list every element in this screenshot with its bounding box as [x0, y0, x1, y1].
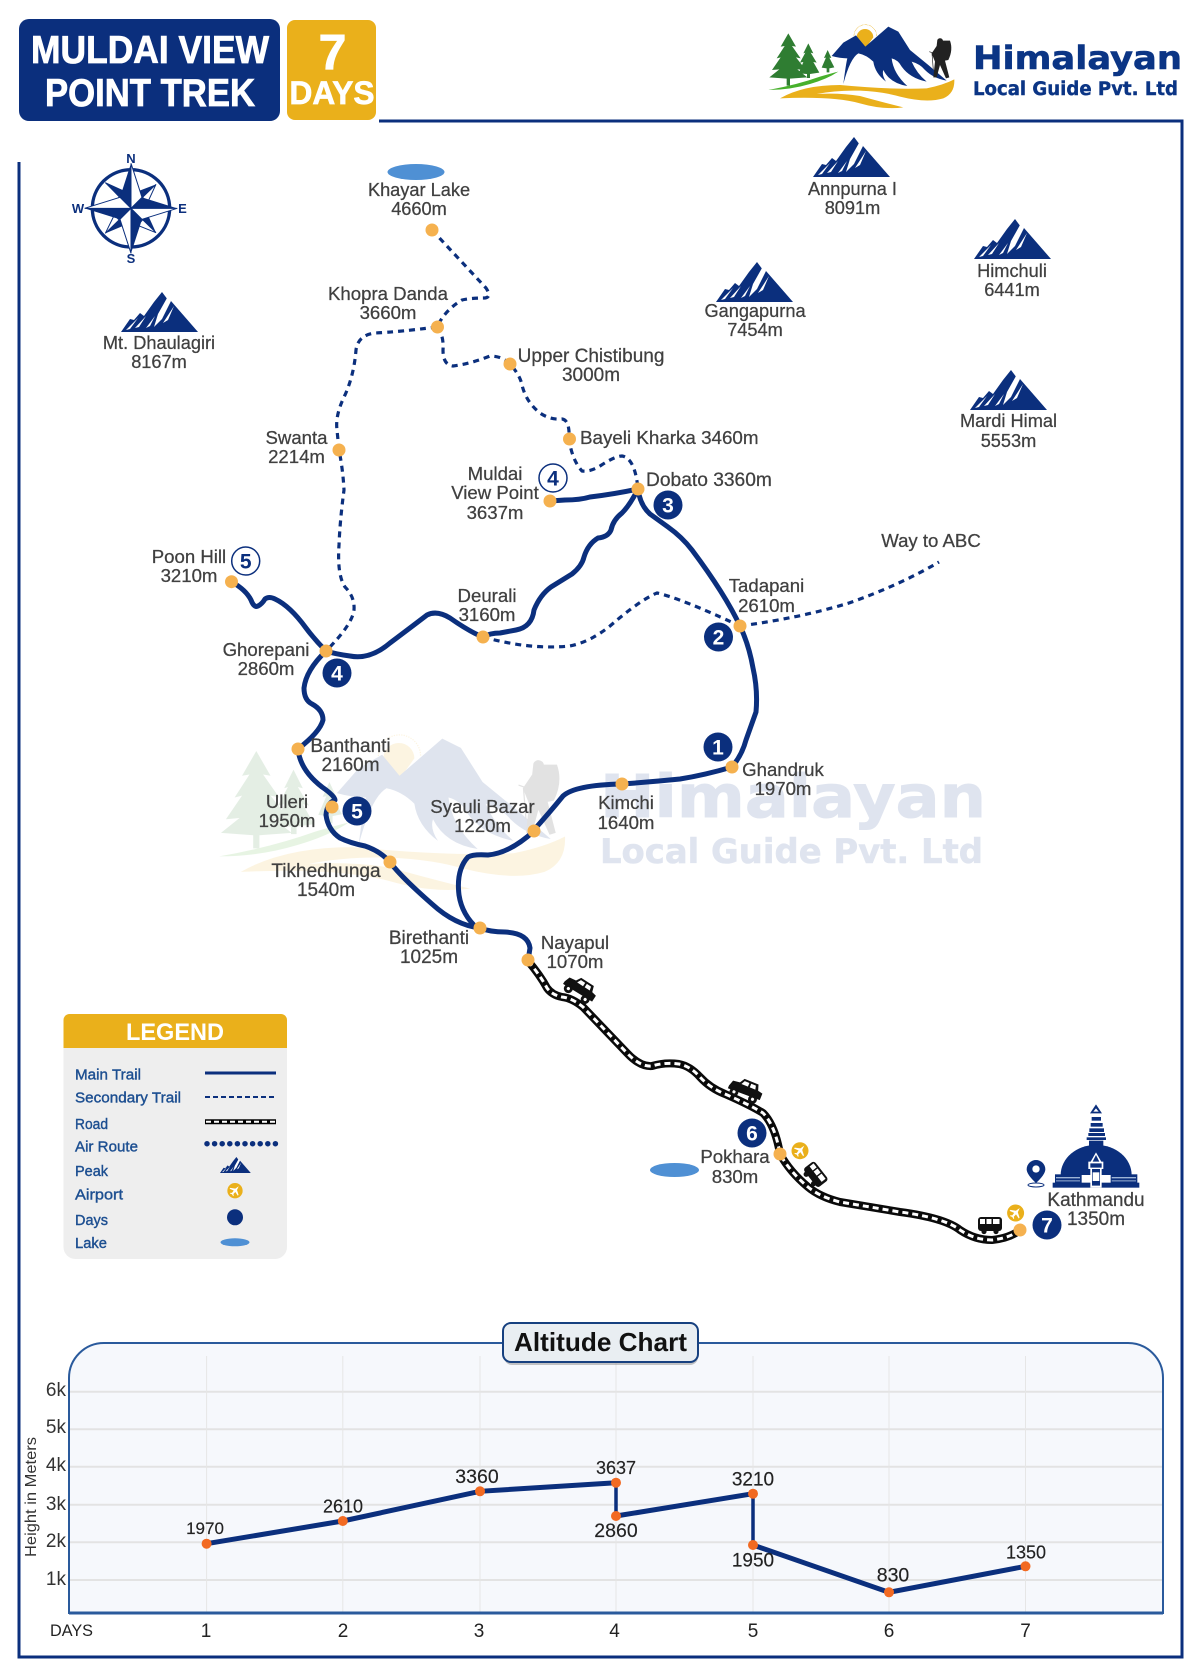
- main trail: [232, 489, 757, 961]
- secondary trails: [326, 230, 939, 651]
- waypoint: Tikhedhunga: Tikhedhunga: [271, 861, 381, 882]
- watermark logo: Local Guide Pvt. Ltd: [600, 832, 983, 872]
- peak: Annpurna I: [808, 137, 897, 218]
- legend header: LEGEND: [126, 1019, 224, 1046]
- waypoint: Muldai View Point: 3637m: [467, 502, 523, 523]
- waypoint: Bayeli Kharka: Bayeli Kharka 3460m: [580, 427, 759, 448]
- legend: main trail: Main Trail: [75, 1066, 141, 1083]
- side trip badge 4: [539, 464, 567, 492]
- waypoint: Poon Hill: 3210m: [161, 565, 217, 586]
- legend panel: [64, 1014, 287, 1259]
- waypoint: Swanta: 2214m: [268, 446, 325, 467]
- vehicles: [560, 971, 1002, 1234]
- watermark logo: Himalayan: [600, 762, 986, 831]
- lake: Phewa at Pokhara: [650, 1163, 699, 1177]
- waypoint: Nayapul: 1070m: [547, 951, 603, 972]
- compass rose: E: [178, 201, 187, 216]
- waypoint: Birethanti: Birethanti: [389, 928, 469, 949]
- waypoint: Upper Chistibung: [504, 346, 664, 386]
- peak: Annpurna I: 8091m: [825, 198, 880, 218]
- waypoint: Kathmandu node: [1014, 1224, 1026, 1236]
- lake: Khayar: Khayar Lake: [368, 180, 470, 200]
- waypoint: Banthanti: Banthanti: [310, 736, 391, 757]
- waypoint: Kimchi: Kimchi: [598, 792, 654, 813]
- stupa and location pin: Kathmandu: [1047, 1190, 1145, 1211]
- x axis labels: DAYS: [50, 1621, 93, 1640]
- day badge 1: 1: [712, 736, 724, 760]
- waypoint: Birethanti: [389, 922, 486, 968]
- waypoint: Ulleri: 1950m: [259, 810, 315, 831]
- waypoint: Ulleri: Ulleri: [266, 791, 308, 812]
- peak: Himchuli: Himchuli: [977, 261, 1047, 281]
- side trip badge 5: [232, 547, 260, 575]
- waypoint: Tadapani: 2610m: [738, 595, 795, 616]
- altitude values: 1970: [186, 1519, 224, 1538]
- watermark logo: [219, 735, 986, 890]
- peak: Gangapurna: Gangapurna: [704, 301, 806, 321]
- legend: road: Road: [75, 1116, 108, 1133]
- waypoint: Syauli Bazar: [430, 796, 540, 838]
- label: Way to ABC: Way to ABC: [881, 530, 981, 551]
- waypoint: Muldai View Point: Muldai: [468, 463, 522, 484]
- waypoint: Khopra Danda: [328, 283, 449, 334]
- legend: air route: Air Route: [75, 1139, 138, 1156]
- side trip badge 5: 5: [240, 550, 252, 574]
- altitude values: 1950: [732, 1551, 774, 1572]
- company logo: Himalayan: [973, 39, 1182, 77]
- stupa and location pin: 1350m: [1067, 1209, 1125, 1230]
- waypoint: Nayapul: [522, 932, 609, 972]
- x axis labels: [50, 1621, 1031, 1642]
- legend: airport: Airport: [75, 1186, 124, 1203]
- y axis labels: 3k: [46, 1494, 66, 1515]
- day badge 4: 4: [331, 662, 343, 686]
- waypoint: Banthanti: [292, 736, 391, 776]
- peak: Mt. Dhaulagiri: 8167m: [131, 352, 187, 372]
- y axis labels: 1k: [46, 1569, 66, 1590]
- duration badge: 7: [319, 24, 346, 80]
- x axis labels: 5: [748, 1621, 758, 1642]
- peak: Mardi Himal: Mardi Himal: [960, 411, 1057, 431]
- day badge 2: [704, 622, 733, 652]
- altitude line: [207, 1483, 1026, 1592]
- waypoint: Ghorepani: Ghorepani: [223, 639, 309, 660]
- day badge 3: [654, 490, 682, 520]
- waypoint: Upper Chistibung: Upper Chistibung: [518, 346, 664, 367]
- chart panel: [69, 1343, 1163, 1613]
- x axis labels: 2: [338, 1621, 348, 1642]
- peak: Himchuli: 6441m: [984, 280, 1040, 300]
- compass rose: N: [126, 151, 136, 166]
- waypoint: Muldai View Point: View Point: [451, 482, 540, 503]
- waypoint: Pokhara: 830m: [712, 1166, 758, 1187]
- duration badge: DAYS: [290, 75, 374, 111]
- legend header: [64, 1014, 287, 1048]
- waypoint: Ulleri: [259, 791, 338, 831]
- altitude values: 2610: [323, 1497, 363, 1517]
- stupa and location pin: [1027, 1104, 1145, 1230]
- waypoint: Tadapani: [729, 575, 804, 632]
- waypoint: Ghandruk: 1970m: [755, 778, 811, 799]
- chart title: Altitude Chart: [514, 1327, 687, 1357]
- altitude chart: [23, 1323, 1163, 1642]
- duration badge: [287, 20, 376, 120]
- compass rose: [72, 151, 187, 266]
- y axis labels: 6k: [46, 1380, 66, 1401]
- waypoint: Birethanti: 1025m: [400, 947, 458, 968]
- legend: days: Days: [75, 1212, 108, 1229]
- day badge 4: [322, 658, 352, 688]
- peak: Himchuli: [974, 219, 1051, 300]
- x axis labels: 3: [474, 1621, 484, 1642]
- waypoint: Upper Chistibung: 3000m: [562, 365, 620, 386]
- altitude values: 3637: [596, 1458, 636, 1478]
- waypoint: Deurali: [458, 585, 516, 644]
- legend: peak: Peak: [75, 1163, 108, 1180]
- peak: Annpurna I: Annpurna I: [808, 179, 897, 199]
- day badge 7: 7: [1041, 1214, 1053, 1238]
- waypoint: Khayar Lake node: [426, 224, 438, 236]
- waypoint: Kimchi: [598, 778, 654, 833]
- day badge 1: [704, 732, 732, 762]
- peak: Mardi Himal: [960, 370, 1057, 451]
- y axis labels: 4k: [46, 1455, 66, 1476]
- altitude values: 1350: [1006, 1543, 1046, 1563]
- waypoint: Tikhedhunga: 1540m: [297, 880, 355, 901]
- x axis labels: 1: [201, 1621, 211, 1642]
- altitude values: 2860: [594, 1520, 638, 1542]
- waypoint: Poon Hill: [152, 546, 238, 588]
- side trip badge 4: 4: [547, 468, 559, 490]
- waypoint: Ghandruk: [726, 759, 825, 799]
- compass rose: S: [127, 251, 136, 266]
- company logo: Local Guide Pvt. Ltd: [973, 79, 1178, 100]
- waypoint: Deurali: Deurali: [458, 585, 516, 606]
- waypoint: Nayapul: Nayapul: [541, 932, 609, 953]
- waypoint: Dobato: Dobato 3360m: [646, 470, 772, 491]
- altitude values: [186, 1458, 1046, 1587]
- lake: Khayar: [368, 164, 470, 219]
- legend: secondary trail: Secondary Trail: [75, 1090, 181, 1107]
- legend: lake: [75, 1235, 250, 1252]
- waypoint: Banthanti: 2160m: [321, 755, 380, 776]
- altitude values: 830: [877, 1565, 909, 1587]
- day badge 6: 6: [746, 1122, 758, 1146]
- altitude points: [202, 1478, 1031, 1597]
- waypoint: Ghorepani: 2860m: [238, 658, 294, 679]
- waypoint: Khopra Danda: Khopra Danda: [328, 283, 448, 304]
- waypoint: Deurali: 3160m: [459, 604, 515, 625]
- peak: Gangapurna: 7454m: [727, 320, 783, 340]
- waypoint: Tikhedhunga: [271, 856, 396, 901]
- day badge 5: [342, 796, 372, 826]
- title banner: MULDAI VIEW: [31, 29, 269, 72]
- day badge 2: 2: [713, 626, 724, 650]
- legend: lake: Lake: [75, 1235, 107, 1252]
- chart grid: [70, 1392, 1162, 1580]
- x axis labels: 7: [1020, 1621, 1031, 1642]
- waypoint: Muldai View Point: [451, 463, 556, 523]
- peak: Mardi Himal: 5553m: [981, 431, 1036, 451]
- altitude values: 3360: [455, 1466, 499, 1488]
- y axis labels: 2k: [46, 1531, 66, 1552]
- x axis labels: 6: [884, 1621, 894, 1642]
- airports: [792, 1142, 1024, 1222]
- legend: airport: [75, 1183, 243, 1203]
- waypoint: Pokhara: Pokhara: [700, 1146, 770, 1167]
- lake: Khayar: 4660m: [391, 199, 447, 219]
- waypoint: Syauli Bazar: Syauli Bazar: [430, 796, 535, 817]
- waypoint: Ghandruk: Ghandruk: [742, 759, 824, 780]
- peak: Gangapurna: [704, 262, 806, 340]
- waypoint: Ghorepani: [223, 639, 332, 679]
- y axis labels: 5k: [46, 1417, 66, 1438]
- title banner: [19, 19, 280, 121]
- compass rose: W: [72, 201, 85, 216]
- company logo: [768, 25, 1182, 108]
- waypoint: Tadapani: Tadapani: [729, 575, 804, 596]
- waypoint: Pokhara: [700, 1146, 786, 1187]
- title banner: POINT TREK: [45, 72, 255, 115]
- day badge 5: 5: [351, 800, 363, 824]
- chart title: [503, 1323, 698, 1365]
- waypoint: Swanta: [265, 427, 346, 467]
- day badge 6: [738, 1118, 766, 1148]
- waypoint: Syauli Bazar: 1220m: [454, 815, 511, 836]
- waypoint: Kimchi: 1640m: [598, 812, 654, 833]
- x axis labels: 4: [609, 1621, 620, 1642]
- legend: peak: [75, 1157, 251, 1180]
- peak: Mt. Dhaulagiri: Mt. Dhaulagiri: [103, 333, 215, 353]
- altitude values: 3210: [732, 1470, 774, 1491]
- y axis title: Height in Meters: [23, 1437, 40, 1557]
- road to Kathmandu: [528, 961, 1020, 1240]
- y axis labels: [46, 1380, 66, 1590]
- peak: Mt. Dhaulagiri: [103, 292, 215, 372]
- day badge 7: [1032, 1210, 1062, 1240]
- legend: days: [75, 1209, 243, 1229]
- waypoint: Khopra Danda: 3660m: [360, 302, 416, 323]
- day badge 3: 3: [662, 494, 674, 518]
- waypoint: Swanta: Swanta: [265, 427, 328, 448]
- waypoint: Poon Hill: Poon Hill: [152, 546, 226, 567]
